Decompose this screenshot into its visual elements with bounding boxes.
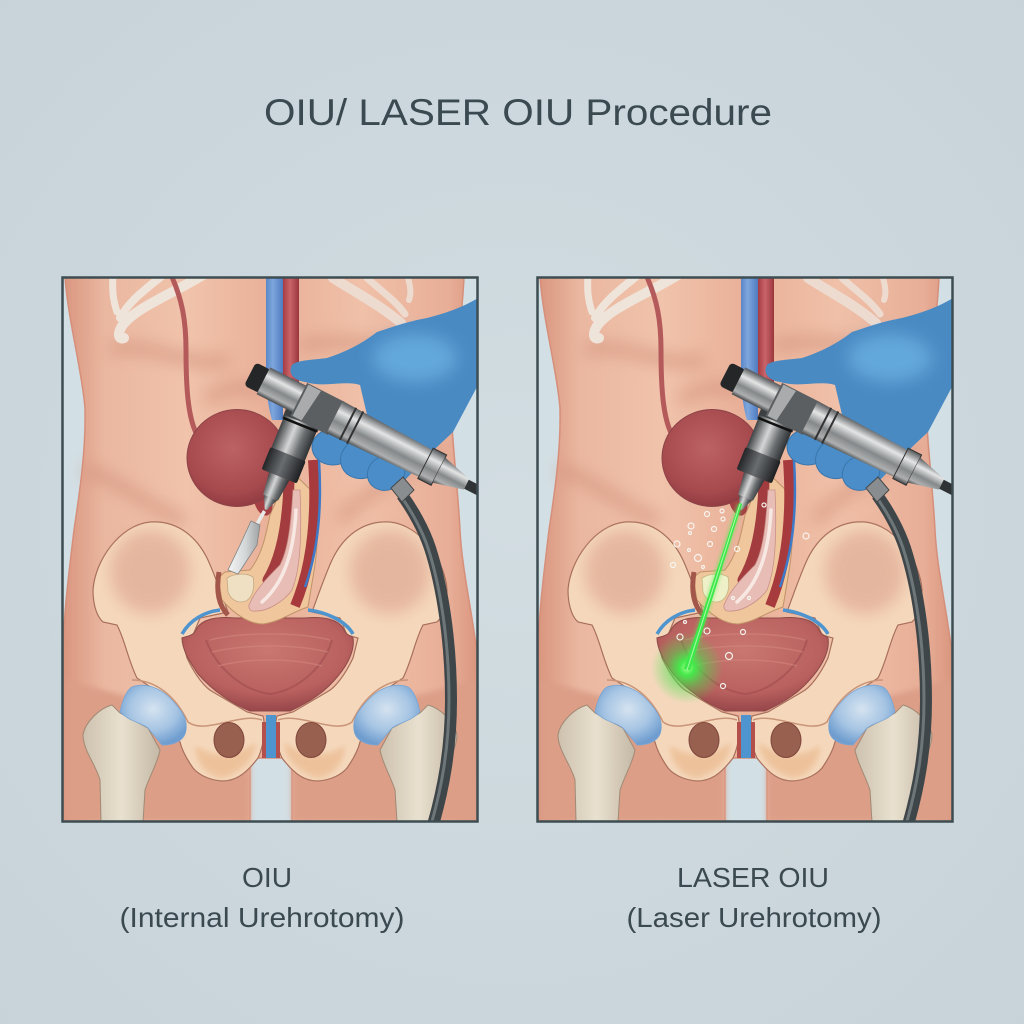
femoral head right [829, 685, 895, 745]
blue pelvic ligaments [182, 610, 353, 634]
endoscope main tube [716, 358, 967, 510]
cable connector [391, 477, 414, 502]
laser glow [651, 632, 723, 704]
gloved hand [766, 298, 953, 496]
pelvic cavity [657, 617, 828, 711]
panel: OIU [62, 275, 492, 825]
panel: LASER OIU [537, 275, 967, 825]
panel frame [538, 278, 952, 822]
gloved hand [291, 298, 478, 496]
bladder [662, 410, 762, 518]
panel frame [62, 278, 478, 822]
abdominal shading [560, 342, 915, 520]
right pelvic bone [751, 522, 922, 781]
ureter [170, 278, 197, 433]
femur left [558, 705, 635, 822]
torso [538, 277, 953, 822]
cable connector [866, 477, 889, 502]
panel background [938, 279, 951, 632]
caption: OIU [120, 862, 404, 933]
caption: LASER OIU: LASER OIU [677, 862, 829, 893]
left pelvic bone [93, 522, 264, 781]
title: OIU/ LASER OIU Procedure [264, 92, 772, 133]
pelvic cavity [182, 617, 353, 711]
urethra cross-section [693, 460, 795, 624]
abdominal shading [85, 342, 440, 520]
caption: LASER OIU [626, 862, 882, 933]
thighs [559, 688, 934, 820]
obturator foramina [689, 722, 801, 758]
endoscope vertical barrel [723, 398, 801, 517]
caption: LASER OIU: (Laser Urehrotomy) [626, 902, 882, 933]
pubic symphysis [737, 715, 755, 758]
femoral head right [354, 685, 420, 745]
ureter [645, 278, 672, 434]
right pelvic bone [276, 522, 447, 781]
aorta [758, 278, 774, 382]
ribs [113, 275, 410, 338]
femur left [83, 705, 160, 822]
bladder [187, 410, 287, 518]
femoral head left [595, 685, 661, 745]
thighs [84, 688, 458, 820]
endoscope vertical barrel [262, 409, 318, 510]
torso [63, 277, 478, 822]
ribs [588, 275, 885, 338]
bubbles [670, 503, 809, 688]
vena cava [741, 277, 758, 420]
obturator foramina [214, 722, 326, 758]
endoscope main tube [245, 364, 476, 495]
femur right [380, 705, 457, 822]
femur right [855, 705, 932, 822]
pubic symphysis [262, 715, 280, 758]
aorta [283, 278, 299, 382]
panel background [64, 280, 82, 610]
vena cava [266, 277, 283, 420]
knife blade [228, 510, 266, 574]
urethra cross-section [218, 460, 320, 624]
caption: OIU: OIU [242, 862, 292, 893]
blue pelvic ligaments [657, 610, 828, 634]
left pelvic bone [568, 522, 739, 781]
laser beam [683, 503, 743, 670]
femoral head left [120, 685, 186, 745]
cable [400, 495, 451, 825]
caption: OIU: (Internal Urehrotomy) [120, 902, 404, 933]
cable [875, 495, 926, 825]
